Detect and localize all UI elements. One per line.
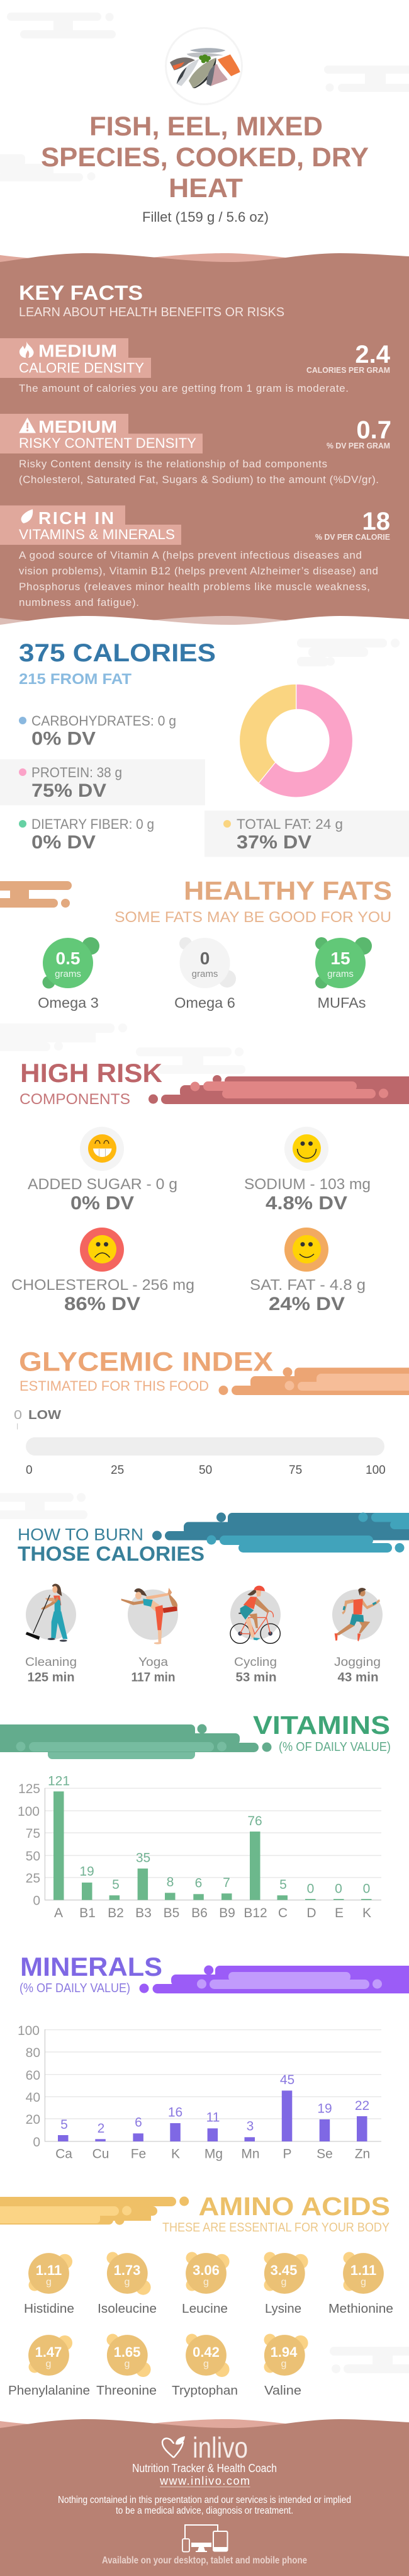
- activity: cleaning: [25, 1584, 77, 1684]
- gauge scale: 50: [199, 1464, 212, 1477]
- website: www.inlivo.com: [159, 2475, 250, 2487]
- value labels: 11: [206, 2110, 220, 2124]
- y axis labels: 100: [18, 1804, 40, 1819]
- macro: total fat: 37% DV: [237, 832, 311, 853]
- activity: jogging: Jogging: [334, 1656, 381, 1669]
- macro: dietary fiber: DIETARY FIBER: 0 g: [31, 816, 154, 832]
- x axis labels: Zn: [355, 2147, 370, 2162]
- wave top: light: [0, 253, 296, 268]
- amino: leucine: Leucine: [182, 2302, 228, 2316]
- value labels: 5: [279, 1878, 287, 1892]
- amino: tryptophan: [172, 2334, 238, 2398]
- x axis labels: Mg: [204, 2147, 223, 2162]
- axes: [45, 1788, 381, 1900]
- icon: sad face: [88, 1235, 116, 1263]
- subheading: 215 FROM FAT: [19, 671, 132, 688]
- decorative blob: [0, 881, 72, 908]
- image ring: [166, 28, 242, 105]
- tagline: Nutrition Tracker & Health Coach: [132, 2462, 277, 2475]
- unit: % DV PER GRAM: [327, 441, 390, 450]
- y axis labels: 60: [26, 2068, 40, 2083]
- axes: [45, 2029, 381, 2141]
- y axis labels: 50: [26, 1849, 40, 1864]
- amino: lysine: g: [281, 2277, 286, 2288]
- highlight band: total fat: [204, 811, 409, 857]
- value labels: 76: [247, 1814, 262, 1828]
- illustration: person cycling: [230, 1586, 281, 1643]
- background cloud: left: [0, 154, 96, 181]
- risk: added sugar: ADDED SUGAR - 0 g: [28, 1176, 177, 1193]
- amino: phenylalanine: 1.47: [35, 2344, 62, 2360]
- subheading: COMPONENTS: [20, 1091, 130, 1108]
- amino: leucine: 3.06: [193, 2262, 220, 2278]
- activity: jogging: 43 min: [337, 1670, 379, 1684]
- wave: light: [0, 2419, 296, 2434]
- x axis labels: Mn: [241, 2147, 260, 2162]
- panel: glycemic index: [14, 1347, 409, 1477]
- background cloud: left: [0, 1023, 127, 1051]
- unit: % DV PER CALORIE: [315, 532, 390, 542]
- y axis labels: 100: [18, 2024, 40, 2038]
- illustration: person sweeping: [26, 1584, 76, 1642]
- value labels: [48, 1774, 370, 1896]
- panel background: [0, 253, 409, 630]
- donut chart: [240, 684, 353, 797]
- fat: omega 6: 0: [200, 949, 210, 968]
- background cloud: [297, 639, 400, 666]
- amino: phenylalanine: Phenylalanine: [8, 2384, 90, 2398]
- amino: valine: 1.94: [271, 2344, 298, 2360]
- value labels: 35: [136, 1851, 150, 1866]
- x axis labels: [55, 2147, 370, 2162]
- title: HEAT: [169, 173, 243, 203]
- gauge scale: 75: [289, 1464, 302, 1477]
- description: [19, 458, 379, 486]
- bar chart: minerals: [18, 2024, 381, 2162]
- fat: MUFAs: grams: [327, 969, 354, 979]
- y axis labels: 125: [18, 1782, 40, 1796]
- macro: protein: 75% DV: [31, 780, 106, 801]
- x axis labels: Se: [317, 2147, 333, 2162]
- y axis labels: 0: [33, 2135, 40, 2150]
- footer background: [0, 2419, 409, 2576]
- amino: valine: g: [281, 2359, 286, 2369]
- x axis labels: [54, 1906, 371, 1920]
- rating label: RISKY CONTENT DENSITY: [19, 435, 196, 451]
- x axis labels: E: [335, 1906, 344, 1920]
- risk: saturated fat: SAT. FAT - 4.8 g: [250, 1277, 366, 1294]
- background cloud: [330, 2347, 409, 2373]
- grid lines: [45, 1788, 381, 1878]
- fat: omega 3: Omega 3: [38, 994, 99, 1011]
- value labels: [60, 2073, 369, 2136]
- panel: vitamins: [0, 1711, 391, 1920]
- amino: methionine: g: [361, 2277, 366, 2288]
- y axis labels: [18, 1782, 40, 1908]
- wave bottom: white: [0, 616, 409, 631]
- value labels: 5: [112, 1878, 120, 1892]
- heading: bold: THOSE CALORIES: [18, 1542, 204, 1565]
- amino: leucine: g: [203, 2277, 209, 2288]
- risk: cholesterol: [11, 1228, 194, 1314]
- subheading: SOME FATS MAY BE GOOD FOR YOU: [115, 909, 391, 926]
- fat: omega 6: Omega 6: [174, 994, 235, 1011]
- serving size: Fillet (159 g / 5.6 oz): [142, 209, 269, 225]
- amino: histidine: [24, 2253, 74, 2316]
- risk: sodium: [244, 1127, 371, 1214]
- marker: value: LOW: [28, 1408, 61, 1422]
- gauge scale: [26, 1464, 386, 1477]
- amino: tryptophan: g: [203, 2359, 209, 2369]
- risk: cholesterol: 86% DV: [64, 1294, 140, 1314]
- x axis labels: B3: [135, 1906, 152, 1920]
- risk: cholesterol: CHOLESTEROL - 256 mg: [11, 1277, 194, 1294]
- value labels: 2: [98, 2121, 104, 2136]
- value labels: 19: [317, 2101, 332, 2116]
- key fact: risky content density: [0, 414, 391, 486]
- amino: isoleucine: [98, 2252, 157, 2316]
- marker: value: [14, 1408, 61, 1430]
- heading: 375 CALORIES: [19, 639, 216, 667]
- x axis labels: K: [362, 1906, 371, 1920]
- decorative blob: [0, 1724, 272, 1759]
- macro: carbohydrates: 0% DV: [31, 728, 96, 749]
- highlight band: protein: [0, 760, 205, 805]
- activity: yoga: [121, 1588, 178, 1684]
- bars: [53, 1791, 371, 1900]
- macro: protein: PROTEIN: 38 g: [31, 765, 122, 780]
- value labels: 16: [168, 2106, 182, 2120]
- description: (Cholesterol, Saturated Fat, Sugars & Sodium) to the amount (%DV/gr).: [19, 474, 379, 486]
- icon: flame: [20, 341, 34, 358]
- amino: methionine: 1.11: [350, 2262, 376, 2278]
- rating: MEDIUM: [38, 341, 117, 360]
- amino: histidine: Histidine: [24, 2302, 74, 2316]
- panel: key facts: [0, 253, 409, 631]
- value labels: 0: [363, 1882, 370, 1896]
- description: numbness and fatigue).: [19, 596, 139, 608]
- unit: CALORIES PER GRAM: [306, 365, 390, 375]
- amino: methionine: [328, 2252, 393, 2316]
- description: vision problems), Vitamin B12 (helps prevent Alzheimer’s disease) and: [19, 565, 378, 577]
- amino: tryptophan: Tryptophan: [172, 2384, 238, 2398]
- label box: [0, 414, 203, 453]
- grid lines: [45, 2030, 381, 2119]
- decorative blob: [152, 1513, 409, 1553]
- y axis labels: [18, 2024, 40, 2150]
- title: FISH, EEL, MIXED: [89, 111, 323, 142]
- heading: MINERALS: [20, 1952, 162, 1981]
- illustration: person jogging: [332, 1588, 383, 1641]
- y axis labels: 0: [33, 1893, 40, 1908]
- heading: AMINO ACIDS: [199, 2192, 390, 2221]
- value labels: 121: [48, 1774, 70, 1788]
- panel: healthy fats: [0, 876, 392, 1011]
- panel: amino acids: [0, 2192, 409, 2398]
- gauge scale: 0: [26, 1464, 33, 1477]
- x axis labels: B1: [79, 1906, 96, 1920]
- marker: value: 0: [14, 1408, 22, 1422]
- value: 0.7: [356, 416, 391, 444]
- icon: mildly smiling face: [293, 1235, 321, 1263]
- value: 18: [362, 508, 390, 535]
- title: [41, 111, 369, 203]
- panel: calories: [0, 639, 409, 857]
- decorative blob: [148, 1075, 409, 1104]
- value labels: 7: [223, 1876, 230, 1890]
- logo: inlivo: [162, 2431, 248, 2464]
- description: A good source of Vitamin A (helps prevent infectious diseases and: [19, 549, 362, 561]
- amino: threonine: g: [125, 2359, 130, 2369]
- activity: cycling: 53 min: [235, 1670, 277, 1684]
- y axis labels: 80: [26, 2046, 40, 2060]
- x axis labels: P: [283, 2147, 292, 2162]
- amino: histidine: 1.11: [36, 2262, 62, 2278]
- icon: grinning face: [88, 1134, 116, 1163]
- subheading: (% OF DAILY VALUE): [279, 1740, 391, 1754]
- amino: isoleucine: 1.73: [114, 2262, 140, 2278]
- illustration: person in yoga pose: [121, 1588, 178, 1644]
- subheading: LEARN ABOUT HEALTH BENEFITS OR RISKS: [19, 305, 284, 319]
- icon: mixed fish: [170, 48, 240, 88]
- value labels: 8: [167, 1875, 174, 1889]
- decorative blob: [140, 1965, 409, 1993]
- macro: total fat: [223, 816, 343, 853]
- value labels: 19: [79, 1864, 94, 1879]
- x axis labels: K: [171, 2147, 180, 2162]
- heading: light: HOW TO BURN: [18, 1525, 143, 1544]
- description: Phosphorus (releaves minor health problems like muscle weakness,: [19, 581, 370, 593]
- panel: how to burn those calories: [0, 1493, 409, 1684]
- rating label: CALORIE DENSITY: [19, 360, 144, 375]
- rating: MEDIUM: [38, 417, 117, 436]
- amino: histidine: g: [46, 2277, 52, 2288]
- amino: lysine: 3.45: [271, 2262, 297, 2278]
- risk: sodium: 4.8% DV: [266, 1193, 347, 1214]
- amino: phenylalanine: [8, 2335, 90, 2398]
- fat: omega 6: [174, 937, 236, 1011]
- y axis labels: 75: [26, 1827, 40, 1841]
- amino: phenylalanine: g: [46, 2359, 51, 2369]
- amino: tryptophan: 0.42: [193, 2344, 220, 2360]
- x axis labels: C: [278, 1906, 288, 1920]
- description: The amount of calories you are getting from 1 gram is moderate.: [19, 382, 349, 394]
- activity: cycling: [230, 1586, 281, 1684]
- heading: HEALTHY FATS: [184, 876, 392, 906]
- decorative blob: [219, 1367, 409, 1395]
- risk: saturated fat: 24% DV: [269, 1294, 345, 1314]
- y axis labels: 20: [26, 2112, 40, 2127]
- risk: added sugar: [28, 1127, 177, 1214]
- x axis labels: B6: [191, 1906, 208, 1920]
- x axis labels: Fe: [131, 2147, 146, 2162]
- panel: minerals: [18, 1952, 409, 2162]
- amino: isoleucine: g: [125, 2277, 130, 2288]
- activity: cleaning: 125 min: [28, 1670, 74, 1684]
- fat: MUFAs: 15: [330, 949, 350, 968]
- value labels: 6: [195, 1876, 202, 1891]
- panel: high risk components: [0, 1023, 409, 1314]
- amino: lysine: [264, 2252, 308, 2316]
- y axis labels: 40: [26, 2090, 40, 2105]
- key fact: calorie density: [0, 338, 391, 394]
- disclaimer: Nothing contained in this presentation and our services is intended or implied: [58, 2495, 351, 2505]
- x axis labels: D: [306, 1906, 317, 1920]
- x axis labels: Ca: [55, 2147, 72, 2162]
- macro: carbohydrates: CARBOHYDRATES: 0 g: [31, 713, 176, 729]
- amino: valine: Valine: [264, 2384, 301, 2398]
- fat: omega 3: 0.5: [56, 949, 80, 968]
- value labels: 3: [247, 2119, 254, 2134]
- x axis labels: B12: [244, 1906, 267, 1920]
- risk: added sugar: 0% DV: [70, 1193, 134, 1214]
- value labels: 45: [280, 2073, 294, 2087]
- title: SPECIES, COOKED, DRY: [41, 142, 369, 173]
- icon: smiling face: [293, 1134, 321, 1163]
- rating label: VITAMINS & MINERALS: [19, 527, 175, 542]
- activity: cycling: Cycling: [234, 1656, 277, 1669]
- x axis labels: B2: [108, 1906, 124, 1920]
- amino: threonine: Threonine: [96, 2384, 157, 2398]
- value labels: 6: [135, 2116, 142, 2130]
- fat: omega 3: [38, 937, 99, 1011]
- activity: yoga: Yoga: [138, 1656, 168, 1669]
- disclaimer: to be a medical advice, diagnosis or treatment.: [116, 2505, 293, 2516]
- amino: isoleucine: Isoleucine: [98, 2302, 157, 2316]
- amino: threonine: [96, 2334, 157, 2398]
- fat: MUFAs: [315, 937, 372, 1011]
- x axis labels: Cu: [92, 2147, 109, 2162]
- amino: lysine: Lysine: [265, 2302, 301, 2316]
- macro: total fat: TOTAL FAT: 24 g: [237, 816, 343, 832]
- macro: carbohydrates: [19, 713, 176, 749]
- icon: desktop, tablet and phone: [182, 2525, 228, 2552]
- fat: omega 6: grams: [192, 969, 218, 979]
- amino: valine: [264, 2334, 308, 2398]
- panel: footer: [0, 2419, 409, 2576]
- availability note: Available on your desktop, tablet and mobile phone: [102, 2555, 307, 2566]
- icon: leaf: [21, 509, 33, 523]
- value labels: 0: [307, 1882, 314, 1896]
- activity: cleaning: Cleaning: [25, 1656, 77, 1669]
- heading: GLYCEMIC INDEX: [19, 1347, 273, 1377]
- decorative blob: [0, 2197, 189, 2225]
- gauge scale: 25: [111, 1464, 124, 1477]
- macro: protein: [19, 765, 122, 801]
- activity: yoga: 117 min: [131, 1670, 175, 1684]
- logo: inlivo: inlivo: [193, 2431, 248, 2464]
- gauge track: [26, 1437, 384, 1456]
- amino: threonine: 1.65: [114, 2344, 140, 2360]
- label box: [0, 505, 181, 545]
- x axis labels: B5: [164, 1906, 179, 1920]
- subheading: (% OF DAILY VALUE): [20, 1981, 130, 1995]
- background cloud: top left: [7, 13, 116, 38]
- amino: methionine: Methionine: [328, 2302, 393, 2316]
- background cloud: right: [324, 66, 409, 92]
- heading: VITAMINS: [253, 1711, 390, 1740]
- amino: leucine: [182, 2252, 230, 2316]
- gauge scale: 100: [366, 1464, 386, 1477]
- heading: KEY FACTS: [19, 282, 143, 304]
- background cloud: [0, 1493, 87, 1519]
- background cloud: right: [136, 1047, 245, 1074]
- y axis labels: 25: [26, 1871, 40, 1886]
- label box: [0, 338, 151, 378]
- icon: warning triangle: [19, 418, 36, 433]
- risk: saturated fat: [250, 1228, 366, 1314]
- value labels: 22: [355, 2099, 369, 2113]
- activity: jogging: [332, 1588, 383, 1684]
- macro: dietary fiber: 0% DV: [31, 832, 96, 853]
- bar chart: vitamins: [18, 1774, 381, 1920]
- value labels: 5: [60, 2117, 68, 2132]
- disclaimer: [58, 2495, 351, 2516]
- fat: omega 3: grams: [55, 969, 81, 979]
- header: food image and title: [0, 13, 409, 225]
- wave bottom: light: [0, 616, 296, 630]
- description: [19, 549, 378, 608]
- rating: RICH IN: [38, 508, 114, 528]
- key fact: vitamins and minerals: [0, 505, 390, 608]
- subheading: THESE ARE ESSENTIAL FOR YOUR BODY: [162, 2221, 389, 2235]
- macro: dietary fiber: [19, 816, 154, 853]
- x axis labels: B9: [219, 1906, 235, 1920]
- risk: sodium: SODIUM - 103 mg: [244, 1176, 371, 1193]
- subheading: ESTIMATED FOR THIS FOOD: [20, 1378, 209, 1394]
- heading: HIGH RISK: [20, 1058, 162, 1088]
- fat: MUFAs: MUFAs: [317, 994, 366, 1011]
- value: 2.4: [355, 341, 391, 368]
- value labels: 0: [335, 1882, 342, 1896]
- bars: [58, 2090, 367, 2141]
- description: Risky Content density is the relationship of bad components: [19, 458, 327, 470]
- x axis labels: A: [54, 1906, 63, 1920]
